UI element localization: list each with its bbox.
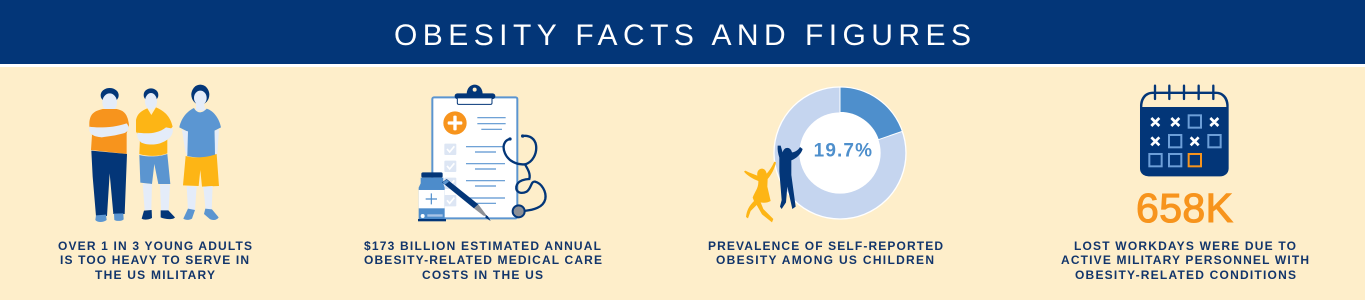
clipboard [432,97,517,218]
stethoscope [504,136,546,211]
centre hole [799,112,881,194]
orange plus [443,111,467,135]
highlighted day [1189,154,1201,166]
caption: medical costs: $173 BILLION ESTIMATED ANNUAL [364,239,601,253]
chest piece [513,205,525,217]
person 3 [179,85,221,220]
donut value: 19.7% [814,141,872,162]
form lines [466,118,506,203]
person 2 [136,88,175,220]
caption: medical costs: COSTS IN THE US [422,268,543,282]
person 1 [89,88,129,222]
medicine bottle [418,172,446,221]
icon: child in navy [778,146,803,209]
icon: calendar [1140,86,1229,176]
remainder ring [774,87,906,219]
title: OBESITY FACTS AND FIGURES [394,19,971,52]
caption: lost workdays [1061,239,1309,282]
crossed days [1151,118,1218,145]
stat: 658K: 658K [1136,185,1233,231]
clip [455,85,495,104]
caption: young adults: OVER 1 IN 3 YOUNG ADULTS [58,239,252,253]
chart: donut 19.7% [744,87,906,222]
caption: children prevalence: PREVALENCE OF SELF-REPORTED [708,239,943,253]
caption: medical costs: OBESITY-RELATED MEDICAL CARE [364,253,602,267]
caption: young adults: IS TOO HEAVY TO SERVE IN [60,253,249,267]
calendar body [1140,92,1229,176]
header band [0,0,1365,67]
caption: children prevalence: OBESITY AMONG US CHILDREN [716,253,934,267]
icon: child in yellow [744,162,776,222]
caption: lost workdays: ACTIVE MILITARY PERSONNEL WITH [1061,253,1309,267]
icon: three young adults [89,85,221,222]
binding rings [1155,86,1213,99]
19.7% wedge [840,87,902,140]
pen [442,179,491,221]
caption: medical costs [364,239,602,282]
caption: lost workdays: OBESITY-RELATED CONDITIONS [1075,268,1296,282]
caption: children prevalence [708,239,943,267]
caption: young adults [58,239,252,282]
checkboxes [444,144,456,206]
icon: clipboard, stethoscope and medicine [418,85,546,221]
open days [1149,115,1221,166]
caption: young adults: THE US MILITARY [95,268,215,282]
caption: lost workdays: LOST WORKDAYS WERE DUE TO [1074,239,1296,253]
